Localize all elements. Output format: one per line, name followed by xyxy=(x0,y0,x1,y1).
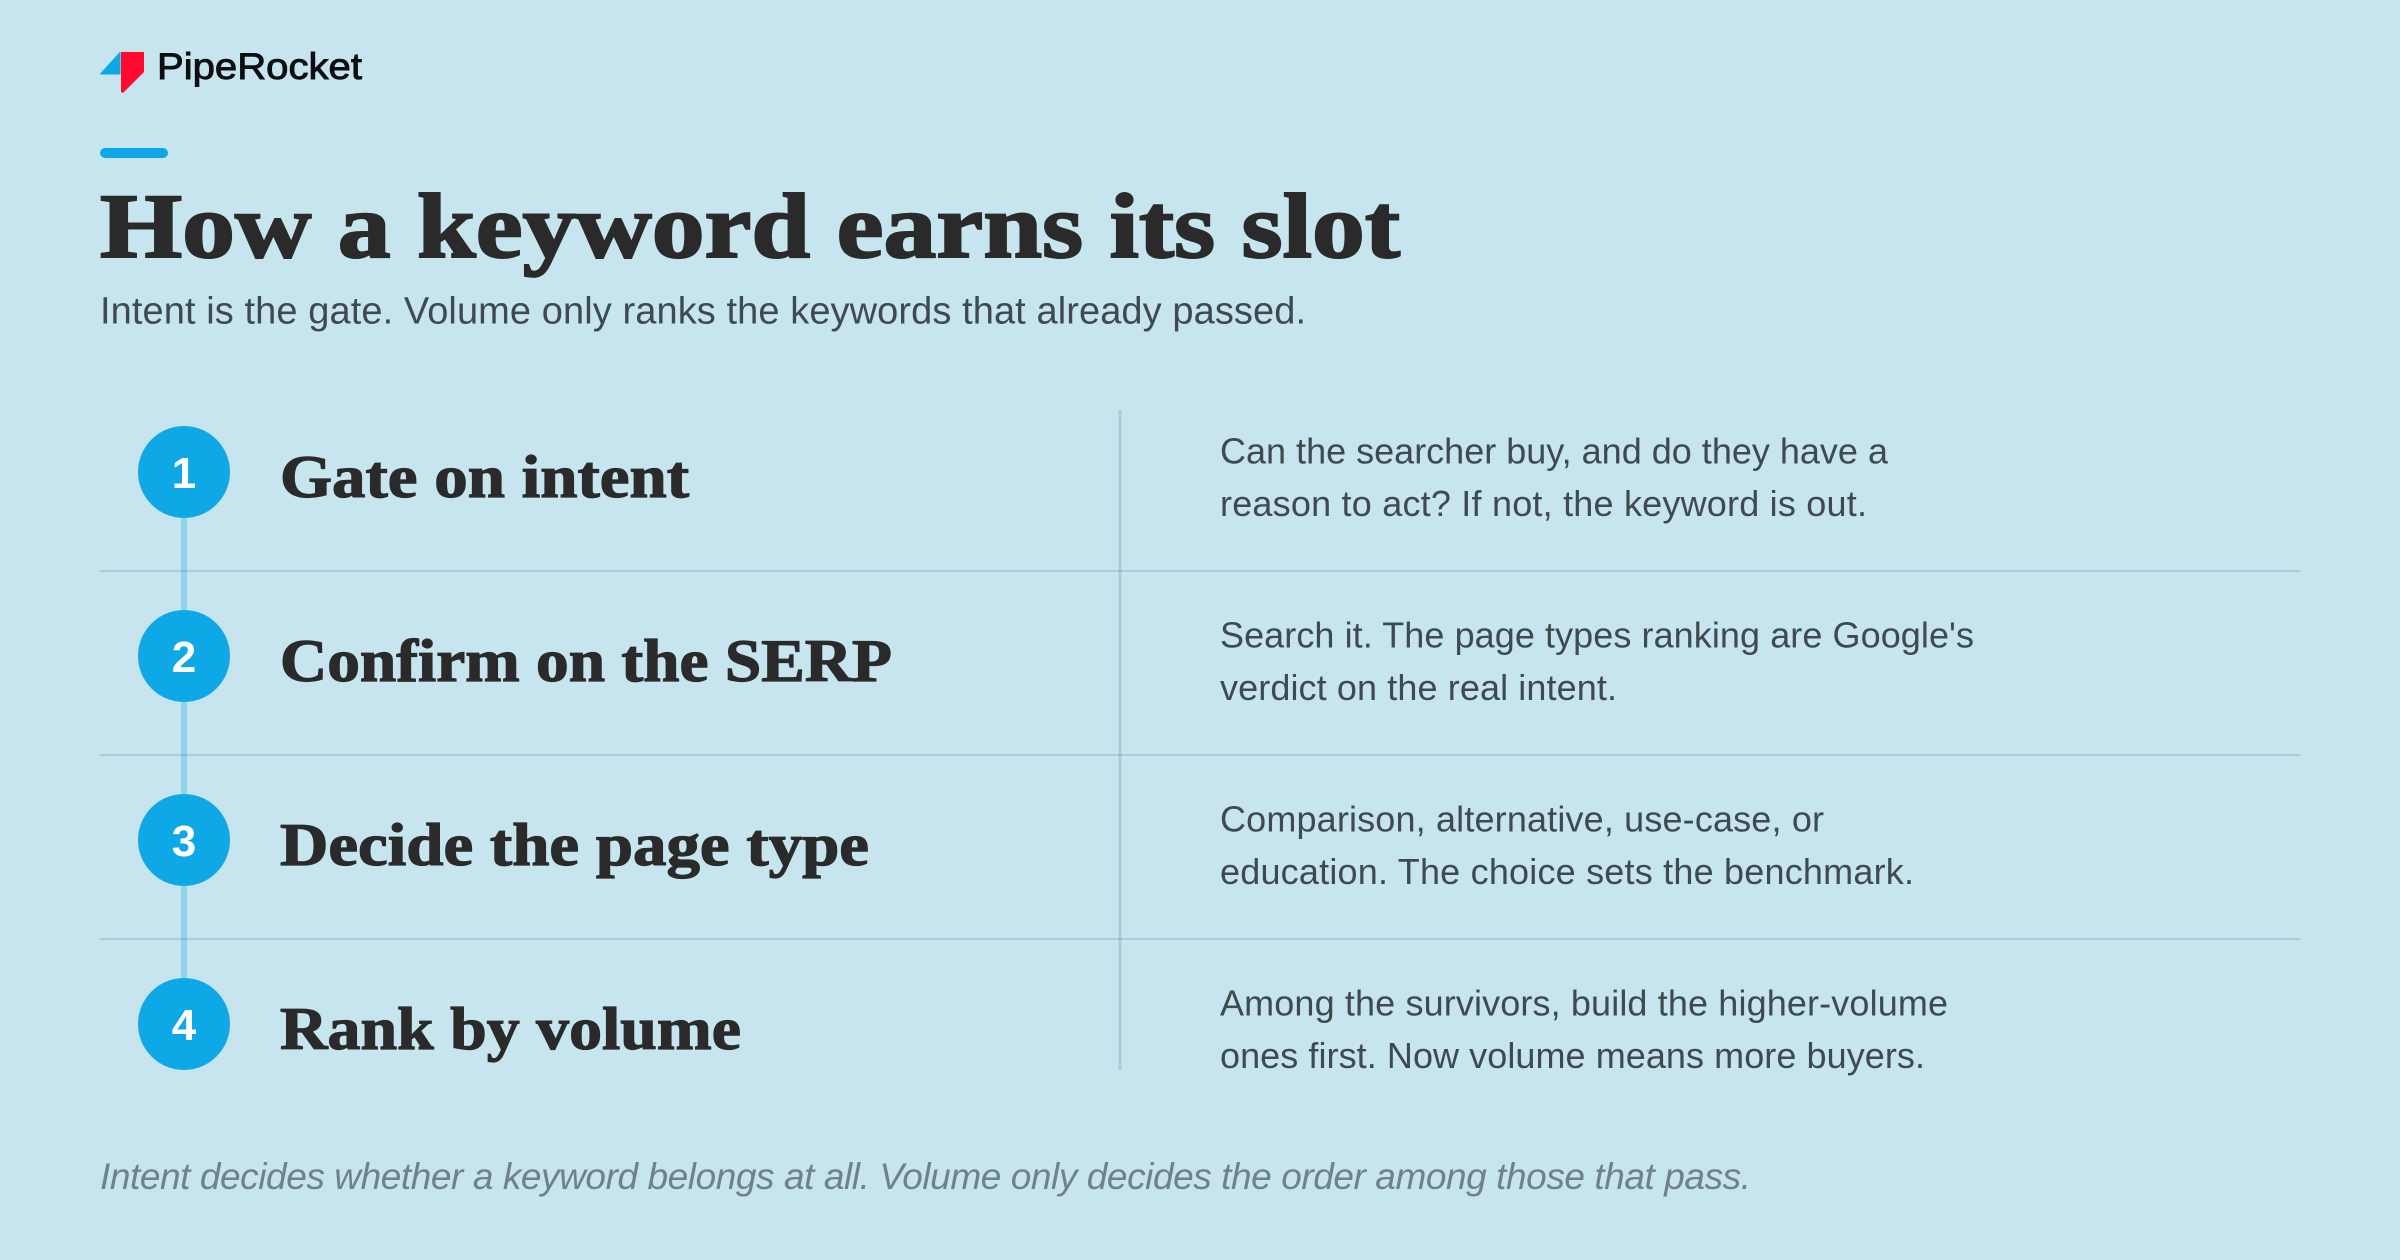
step connector line xyxy=(181,518,187,978)
number badge 3: 3 xyxy=(172,817,196,866)
step 3 description: Comparison, alternative, use-case, or xyxy=(1220,798,1824,840)
step 2: confirm on the SERP xyxy=(138,610,1974,708)
number badge 3 xyxy=(138,794,230,886)
step 1: gate on intent xyxy=(138,426,1889,524)
step 1 heading: Gate on intent xyxy=(280,444,689,510)
step 3: decide the page type xyxy=(138,794,1914,892)
table dividers xyxy=(100,410,2300,1070)
step 2 description: verdict on the real intent. xyxy=(1220,667,1617,708)
number badge 1 xyxy=(138,426,230,518)
logo wordmark: PipeRocket xyxy=(157,46,363,87)
number badge 4: 4 xyxy=(172,1001,197,1050)
number badge 1: 1 xyxy=(172,449,196,498)
number badge 4 xyxy=(138,978,230,1070)
step 1 description: reason to act? If not, the keyword is out. xyxy=(1220,483,1867,524)
footer note: Intent decides whether a keyword belongs at all. Volume only decides the order among those that pass. xyxy=(100,1156,1751,1197)
step 4 description: ones first. Now volume means more buyers. xyxy=(1220,1035,1925,1076)
title: How a keyword earns its slot xyxy=(100,175,1400,277)
step 4: rank by volume xyxy=(138,978,1948,1076)
accent bar xyxy=(100,148,168,158)
step 3 heading: Decide the page type xyxy=(280,812,869,878)
step 4 description: Among the survivors, build the higher-volume xyxy=(1220,982,1948,1024)
step 4 heading: Rank by volume xyxy=(280,996,741,1062)
step 2 heading: Confirm on the SERP xyxy=(280,628,892,694)
step 1 description: Can the searcher buy, and do they have a xyxy=(1220,430,1889,472)
logo: PipeRocket xyxy=(100,46,363,93)
number badge 2 xyxy=(138,610,230,702)
step 4 description xyxy=(1220,982,1948,1076)
step 3 description xyxy=(1220,798,1914,892)
icon: rocket mark xyxy=(100,52,144,93)
subtitle: Intent is the gate. Volume only ranks the keywords that already passed. xyxy=(100,290,1306,332)
step 1 description xyxy=(1220,430,1889,524)
step 2 description: Search it. The page types ranking are Google's xyxy=(1220,614,1974,656)
step 3 description: education. The choice sets the benchmark. xyxy=(1220,851,1914,892)
number badge 2: 2 xyxy=(172,633,196,682)
step 2 description xyxy=(1220,614,1974,708)
